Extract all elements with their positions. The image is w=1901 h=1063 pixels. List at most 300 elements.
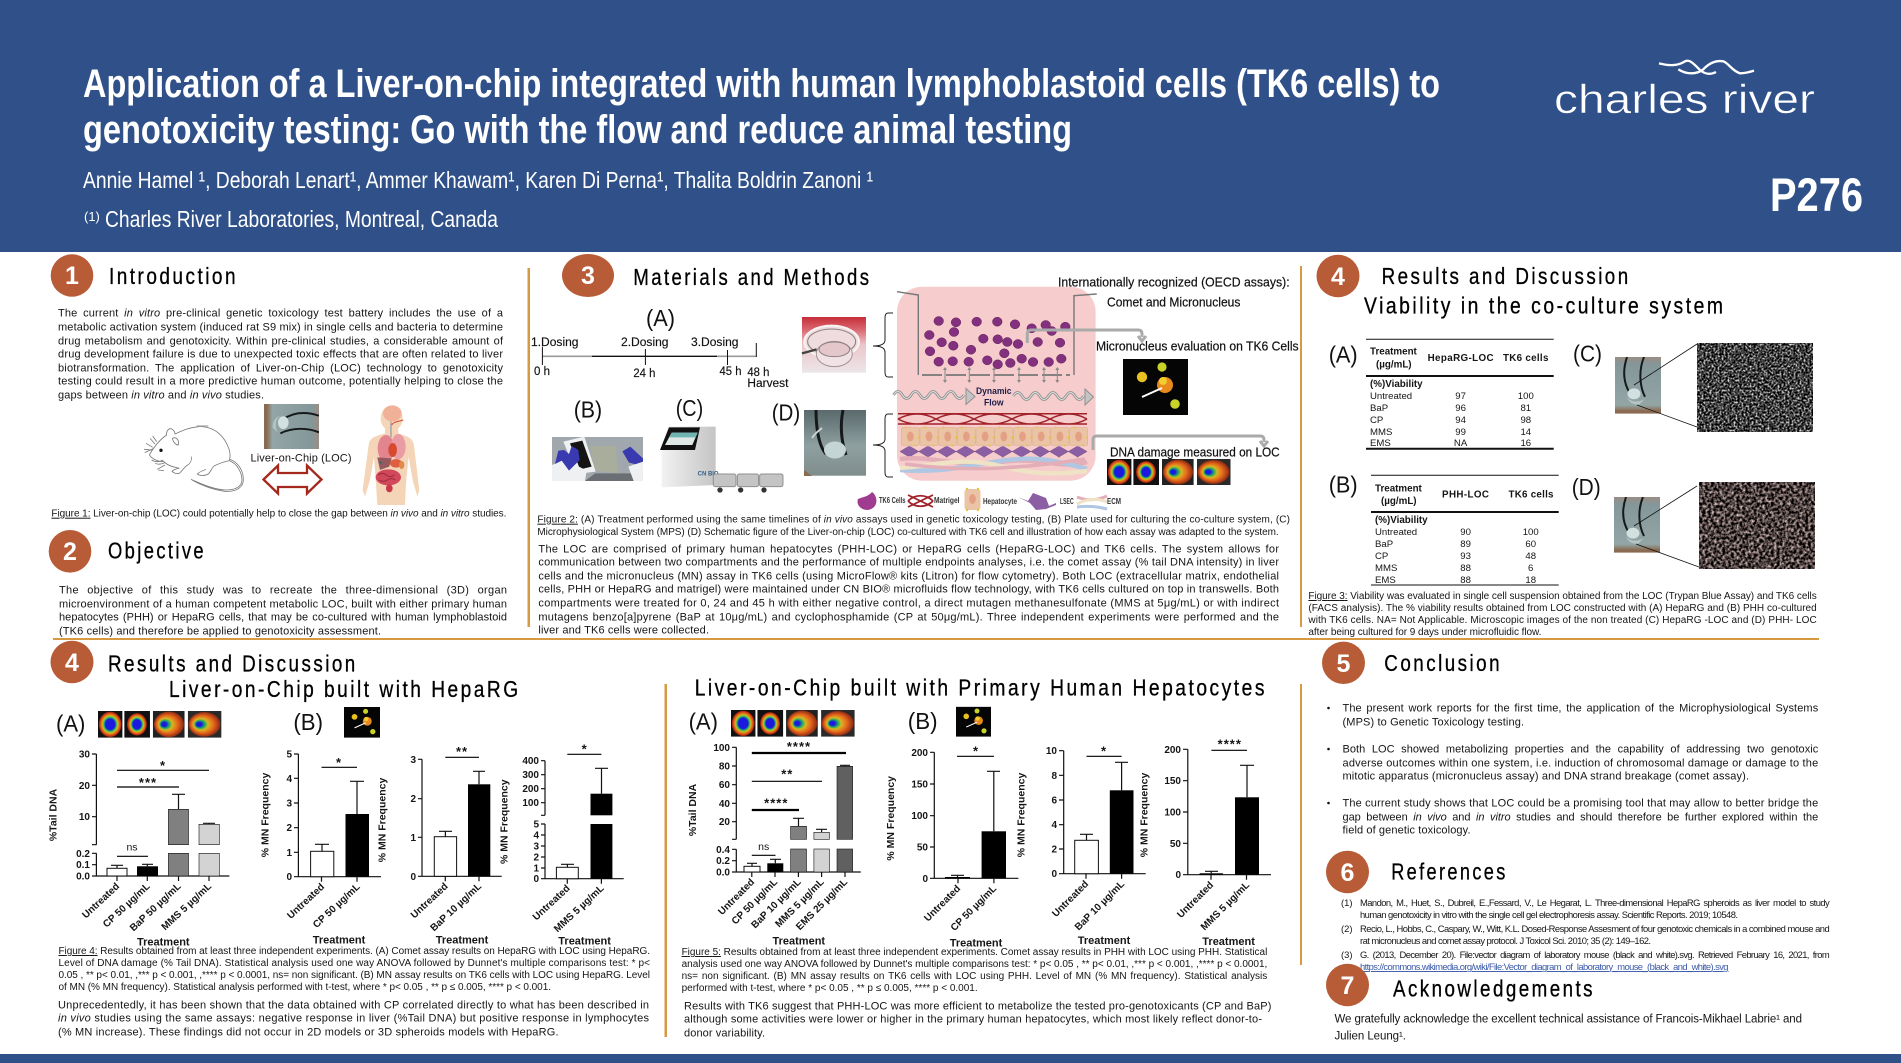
schematic: liver-on-chip compartment xyxy=(894,287,1097,481)
label table B: (B) xyxy=(1329,471,1358,497)
chart: MN frequency CP PHH: Treatment xyxy=(950,938,1003,950)
chart: MN frequency CP PHH: 200 xyxy=(911,748,928,759)
chart: MN frequency MMS PHH: 50 xyxy=(1170,839,1181,850)
chart: MN frequency BaP PHH: 0 xyxy=(1051,869,1057,880)
table B: PHH-LOC viability: (µg/mL) xyxy=(1381,496,1417,507)
chart: tail DNA HepaRG: %Tail DNA xyxy=(48,788,60,841)
panel: acknowledgements xyxy=(1326,964,1802,1042)
bullet points: field of genetic toxicology. xyxy=(1342,825,1470,837)
logo: charles river xyxy=(1554,61,1815,122)
reference list: G. (2013, December 20). File:vector diagram of laboratory mouse (black and white).svg. Retrieved February 16, 2021, from xyxy=(1360,949,1830,960)
label D: (D) xyxy=(772,400,800,426)
table A: HepaRG-LOC viability: Treatment xyxy=(1370,347,1418,358)
table B: PHH-LOC viability: 100 xyxy=(1523,527,1539,538)
chart: tail DNA HepaRG: 0.0 xyxy=(76,872,90,882)
chart: tail DNA PHH xyxy=(687,739,861,948)
reference list: (1) xyxy=(1341,897,1352,908)
badge 3 xyxy=(562,254,614,297)
chart: tail DNA HepaRG: 20 xyxy=(79,781,90,792)
chart: tail DNA HepaRG: ns xyxy=(126,842,138,854)
chart: MN frequency MMS PHH: 0 xyxy=(1175,870,1181,881)
table A: HepaRG-LOC viability: EMS xyxy=(1370,438,1391,449)
schematic: matrigel layer xyxy=(898,414,1087,424)
label B: (B) xyxy=(574,396,602,422)
chart: MN frequency CP PHH: Untreated xyxy=(922,883,963,924)
panel: viability results xyxy=(1307,255,1817,638)
chart: tail DNA HepaRG: * xyxy=(160,758,166,773)
figure 4 caption: Figure 4: Results obtained from at least three independent experiments. (A) Comet assay results on HepaRG with LOC using HepaRG. xyxy=(58,946,650,957)
photo: culture plate in gloved hands xyxy=(552,437,643,481)
table B: PHH-LOC viability: 90 xyxy=(1460,527,1471,538)
chart: tail DNA PHH: ** xyxy=(781,766,793,782)
table B: PHH-LOC viability: 89 xyxy=(1460,539,1471,550)
heading: results and discussion: Results and Discussion xyxy=(108,651,358,677)
table B: PHH-LOC viability: CP xyxy=(1375,551,1388,562)
chart: MN frequency MMS: % MN Frequency xyxy=(498,779,510,864)
reference list: Mandon, M., Huet, S., Dubreil, E.,Fessard, V., Le Hegarat, L. Three-dimensional HepaRG spheroids as liver model to study xyxy=(1360,897,1830,908)
table A: HepaRG-LOC viability: 94 xyxy=(1455,415,1467,426)
bullet points xyxy=(1327,703,1819,837)
heading: objective: Objective xyxy=(108,538,206,564)
logo: charles river: charles river xyxy=(1554,76,1815,122)
figure 3 caption: Figure 3: Viability was evaluated in single cell suspension obtained from the LOC (Trypan Blue Assay) and TK6 cells xyxy=(1308,591,1817,602)
objective text: microenvironment of a human competent metabolic LOC, built with either primary human xyxy=(59,598,507,610)
chart: MN frequency BaP PHH: * xyxy=(1101,744,1107,758)
figure 4 caption: of MN (% MN frequency). Statistical analysis performed with t-test, where * p< 0.05 , ** p ≤ 0.005, **** p < 0.001. xyxy=(58,982,551,993)
figure 2 caption xyxy=(537,515,1290,538)
heading: introduction: Introduction xyxy=(109,263,238,289)
badge 1 xyxy=(51,254,93,297)
chart: tail DNA HepaRG: 10 xyxy=(79,812,90,823)
chart: MN frequency CP: 5 xyxy=(286,750,292,760)
chart: MN frequency MMS PHH: Untreated xyxy=(1175,880,1216,921)
badge 3: 3 xyxy=(581,262,595,290)
badge 4 bottom xyxy=(50,641,94,683)
table B: PHH-LOC viability: MMS xyxy=(1375,563,1397,574)
objective text: (TK6 cells) and therefore be applied to genotoxicity assessment. xyxy=(59,626,381,638)
chart: MN frequency MMS: 2 xyxy=(533,852,539,864)
chart: MN frequency CP: 3 xyxy=(286,798,292,810)
micronucleus image xyxy=(956,707,991,737)
bullet points: adverse outcomes within one system, i.e. induction of chromosomal damage or damage to the xyxy=(1342,758,1818,770)
intro text: testing could result in a more predictive human outcome, potentially helping to close the xyxy=(58,376,503,388)
bullet points: gap between in vivo and in vitro studies and should therefore be further explored within the xyxy=(1342,812,1818,824)
chart: MN frequency BaP PHH: 10 xyxy=(1046,746,1057,757)
comet images xyxy=(98,711,221,738)
chart: tail DNA PHH: BaP 10 µg/mL xyxy=(749,877,804,931)
badge 5: 5 xyxy=(1337,650,1351,678)
figure 4 caption: 0.05 , ** p< 0.01, ,*** p < 0.001, ,**** p < 0.0001, ns= non significant. (B) MN assay results on TK6 cells with LOC using HepaRG. Level xyxy=(58,970,650,981)
table A: HepaRG-LOC viability xyxy=(1366,339,1554,449)
table B: PHH-LOC viability: 88 xyxy=(1460,563,1471,574)
table A: HepaRG-LOC viability: 16 xyxy=(1520,438,1531,449)
panel: introduction xyxy=(51,254,506,520)
chart: MN frequency MMS: 1 xyxy=(533,864,539,874)
methods text: mutagens benzo[a]pyrene (BaP at 10μg/mL) and cyclophosphamide (CP at 50μg/mL). Three independent experiments were performed and the xyxy=(538,612,1279,624)
figure 2 caption: Figure 2: (A) Treatment performed using the same timelines of in vivo assays used in genetic toxicology testing, (B) Plate used for culturing the co-culture system, (C) xyxy=(537,515,1290,526)
acknowledgement text: Julien Leung¹. xyxy=(1334,1030,1406,1042)
schematic: hepatocyte layer xyxy=(901,426,1088,446)
bullet points: Both LOC showed metabolizing properties and the capability of addressing two genotoxic xyxy=(1342,744,1819,756)
chart: tail DNA PHH: 80 xyxy=(719,762,730,772)
HepaRG results text xyxy=(58,1000,650,1038)
acknowledgement text xyxy=(1334,1014,1802,1042)
timeline: 0 h xyxy=(534,366,550,378)
affiliation: (1) xyxy=(84,209,100,224)
table A: HepaRG-LOC viability: 81 xyxy=(1520,403,1531,414)
methods text: communication between two compartments and the performance of multiple endpoints analyses, i.e. the comet assay (% tail DNA intensity) in liver xyxy=(538,557,1279,569)
methods text: The LOC are comprised of primary human hepatocytes (PHH-LOC) or HepaRG cells (HepaRG-LOC) and TK6 cells. The system allows for xyxy=(538,544,1279,556)
chart: MN frequency BaP PHH: 4 xyxy=(1051,820,1057,831)
chart: MN frequency MMS: 300 xyxy=(522,770,539,781)
chart: MN frequency BaP: BaP 10 µg/mL xyxy=(429,881,484,934)
chart: MN frequency CP PHH: % MN Frequency xyxy=(885,776,897,861)
chart: MN frequency MMS: 100 xyxy=(522,798,539,809)
chart: MN frequency BaP: 2 xyxy=(410,794,416,805)
micrograph C with chip xyxy=(1615,343,1813,432)
methods text xyxy=(538,544,1279,636)
label table A: (A) xyxy=(1329,342,1358,368)
figure 5 caption: performed with t-test, where * p< 0.05 , ** p ≤ 0.005, **** p < 0.001. xyxy=(682,983,978,994)
timeline: 1.Dosing xyxy=(531,337,578,349)
table A: HepaRG-LOC viability: 14 xyxy=(1520,427,1532,438)
chart: tail DNA PHH: %Tail DNA xyxy=(687,783,699,836)
label A: (A) xyxy=(56,711,85,737)
heading: references: References xyxy=(1391,858,1508,884)
HepaRG results text: (% MN increase). These findings did not occur in 2D models or 3D spheroids models with HepaRG. xyxy=(58,1026,558,1038)
table A: HepaRG-LOC viability: BaP xyxy=(1370,403,1388,414)
chart: MN frequency BaP: Treatment xyxy=(436,935,489,947)
chart: MN frequency BaP: ** xyxy=(456,744,468,759)
chart: tail DNA HepaRG: CP 50 µg/mL xyxy=(101,881,153,930)
table B: PHH-LOC viability: 18 xyxy=(1525,575,1536,586)
chart: MN frequency MMS PHH: 100 xyxy=(1164,808,1181,818)
chart: MN frequency MMS: 4 xyxy=(533,830,539,842)
assay callout text: Internationally recognized (OECD assays): xyxy=(1058,276,1290,290)
figure 3 caption xyxy=(1307,591,1817,638)
objective text: The objective of this study was to recreate the three-dimensional (3D) organ xyxy=(59,584,507,596)
chart: MN frequency BaP: 3 xyxy=(410,755,416,766)
figure 5 caption: Figure 5: Results obtained from at least three independent experiments. Comet assay results in PHH with LOC using PHH. Statistical xyxy=(682,947,1267,958)
intro text: The current in vitro pre-clinical genetic toxicology test battery includes the use of a xyxy=(58,308,504,320)
chart: MN frequency MMS: 3 xyxy=(533,842,539,852)
chart: tail DNA PHH: MMS 5 µg/mL xyxy=(774,877,827,930)
figure 4 caption: Level of DNA damage (% Tail DNA). Statistical analysis used one way ANOVA followed by Dunnet's multiple comparisons test: * p< xyxy=(58,958,650,969)
table B: PHH-LOC viability: 88 xyxy=(1460,575,1471,586)
chart: tail DNA PHH: 60 xyxy=(719,780,730,791)
chart: MN frequency MMS PHH: Treatment xyxy=(1202,936,1255,948)
chart: MN frequency BaP PHH: % MN Frequency xyxy=(1015,773,1027,857)
chart: MN frequency MMS PHH: MMS 5 µg/mL xyxy=(1199,880,1252,933)
schematic legend: Matrigel xyxy=(934,496,960,505)
authors: Annie Hamel ¹, Deborah Lenart¹, Ammer Khawam¹, Karen Di Perna¹, Thalita Boldrin Zanoni ¹ xyxy=(83,167,873,193)
chart: MN frequency BaP PHH: Untreated xyxy=(1050,879,1091,920)
chart: MN frequency BaP PHH: Treatment xyxy=(1078,935,1131,947)
PHH results text: donor variability. xyxy=(684,1028,765,1040)
chart: MN frequency MMS PHH: **** xyxy=(1218,736,1242,752)
chart: MN frequency CP PHH: 0 xyxy=(922,874,928,885)
table B: PHH-LOC viability: (%)Viability xyxy=(1375,515,1428,526)
heading: conclusion: Conclusion xyxy=(1384,650,1502,676)
reference list: https://commons.wikimedia.org/wiki/File:Vector_diagram_of_laboratory_mouse_(black_and_white).svg xyxy=(1360,961,1728,972)
methods text: compartments were treated for 0, 24 and 45 h with either negative control, a direct mutagen methanesulfonate (MMS at 5μg/mL) or with indirect xyxy=(538,598,1279,610)
chart: MN frequency CP: Untreated xyxy=(285,882,327,922)
comet images xyxy=(1107,459,1230,485)
table B: PHH-LOC viability: Treatment xyxy=(1375,484,1423,495)
bullet points: The present work reports for the first time, the application of the Microphysiological Systems xyxy=(1342,703,1819,715)
table A: HepaRG-LOC viability: Untreated xyxy=(1370,391,1412,402)
badge 6 xyxy=(1326,851,1369,893)
heading: materials and methods: Materials and Methods xyxy=(633,264,871,290)
table B: PHH-LOC viability: 93 xyxy=(1460,551,1471,562)
objective text: hepatocytes (PHH) or HepaRG cells, that may be co-cultured with human lymphoblastoid xyxy=(59,612,507,624)
badge 1: 1 xyxy=(65,262,79,290)
timeline: 45 h xyxy=(720,366,742,378)
bullet points: (MPS) to Genetic Toxicology testing. xyxy=(1342,717,1524,729)
panel: references xyxy=(1326,851,1830,972)
table B: PHH-LOC viability: 60 xyxy=(1525,539,1536,550)
HepaRG results text: in vivo studies using the same assays: negative response in liver (%Tail DNA) but positive response in lymphocytes xyxy=(58,1013,650,1025)
timeline: 3.Dosing xyxy=(691,337,738,349)
affiliation: Charles River Laboratories, Montreal, Canada xyxy=(105,206,498,232)
intro text: biotransformation. The application of Liver-on-Chip (LOC) technology to genotoxicity xyxy=(58,362,504,374)
table A: HepaRG-LOC viability: CP xyxy=(1370,415,1383,426)
chart: MN frequency MMS PHH xyxy=(1139,736,1271,948)
chart: MN frequency CP: % MN Frequency xyxy=(260,773,272,857)
badge 7 xyxy=(1326,964,1369,1006)
chart: tail DNA PHH: **** xyxy=(764,796,788,810)
chart: MN frequency BaP PHH xyxy=(1015,744,1146,947)
chart: MN frequency BaP PHH: BaP 10 µg/mL xyxy=(1073,879,1127,933)
chart: MN frequency MMS: * xyxy=(582,742,588,756)
comet images xyxy=(731,710,855,737)
label C: (C) xyxy=(676,395,703,421)
timeline: 24 h xyxy=(633,368,655,380)
methods text: cells, PHH or HepaRG and matrigel) were maintained under CN BIO® microfluids flow technology, with TK6 cells cultured on top in transwells. Both xyxy=(538,584,1279,596)
badge 4 top xyxy=(1316,255,1360,297)
figure 2 caption: Microphysiological System (MPS) (D) Schematic figure of the Liver-on-chip (LOC) co-cultured with TK6 cell and illustration of how each assay was adapted to the system. xyxy=(537,527,1279,538)
chart: tail DNA HepaRG: 30 xyxy=(79,750,90,760)
chart: MN frequency MMS: 400 xyxy=(522,756,539,767)
schematic: dynamic flow label: Flow xyxy=(984,398,1005,408)
chart: MN frequency BaP PHH: 8 xyxy=(1051,771,1057,782)
figure 5 caption xyxy=(682,947,1267,994)
heading: results and discussion: Results and Discussion xyxy=(1382,263,1631,289)
chart: MN frequency BaP PHH: 6 xyxy=(1051,796,1057,806)
acknowledgement text: We gratefully acknowledge the excellent technical assistance of Francois-Mikhael Labrie¹ and xyxy=(1334,1014,1802,1026)
chart: tail DNA HepaRG: Treatment xyxy=(137,937,190,949)
timeline: Harvest xyxy=(747,378,789,390)
figure 1: liver chip photo xyxy=(264,404,319,449)
chart: MN frequency CP: 2 xyxy=(286,823,292,834)
badge 4 top: 4 xyxy=(1331,263,1345,291)
assay callout text xyxy=(1058,276,1290,310)
chart: MN frequency BaP: 1 xyxy=(410,833,416,844)
HepaRG results text: Unprecedentedly, it has been shown that the data obtained with CP correlated directly to what has been described in xyxy=(58,1000,649,1012)
chart: MN frequency MMS PHH: 150 xyxy=(1164,776,1181,787)
photo: microphysiological system instrument: CN BIO xyxy=(698,472,719,478)
title xyxy=(83,62,1440,152)
brackets xyxy=(873,313,893,477)
chart: MN frequency CP PHH: * xyxy=(973,744,979,758)
table A: HepaRG-LOC viability: MMS xyxy=(1370,427,1392,438)
table B: PHH-LOC viability: PHH-LOC xyxy=(1442,490,1489,501)
label B: (B) xyxy=(908,708,938,734)
section dividers xyxy=(53,266,1819,1037)
schematic: flow arrows xyxy=(894,388,1094,405)
reference list: Recio, L., Hobbs, C., Caspary, W., Witt, K.L. Dosed-Response Assesment of four genotoxic chemicals in a combined mouse and xyxy=(1360,923,1830,934)
label C: (C) xyxy=(1573,341,1602,367)
schematic: ECM layer xyxy=(900,458,1087,473)
chart: MN frequency BaP: Untreated xyxy=(409,881,451,921)
subheading: PHH: Liver-on-Chip built with Primary Human Hepatocytes xyxy=(695,675,1267,701)
chart: tail DNA PHH: Treatment xyxy=(773,936,825,948)
chart: MN frequency CP xyxy=(260,750,381,947)
panel: materials and methods xyxy=(531,254,1299,636)
micronucleus image xyxy=(1123,359,1188,415)
reference list: human genotoxicity in vitro with the single cell gel electrophoresis assay. Scientific Reports. 2019; 10548. xyxy=(1360,909,1738,920)
figure 4 caption xyxy=(58,946,650,993)
chart: MN frequency MMS: Treatment xyxy=(558,936,611,948)
bullet points: The current study shows that LOC could be a promising tool that may allow to better bridge the xyxy=(1342,798,1818,810)
table A: HepaRG-LOC viability: TK6 cells xyxy=(1503,353,1549,364)
chart: MN frequency CP PHH: 100 xyxy=(911,811,928,822)
chart: MN frequency CP PHH: 150 xyxy=(911,780,928,790)
table A: HepaRG-LOC viability: NA xyxy=(1454,438,1468,449)
badge 6: 6 xyxy=(1341,859,1354,887)
figure 3 caption: (FACS analysis). The % viability results obtained from LOC constructed with (A) HepaRG and (B) PHH co-cultured xyxy=(1308,603,1817,614)
chart: MN frequency MMS: 0 xyxy=(533,874,539,885)
label A: (A) xyxy=(689,708,718,734)
timeline xyxy=(531,337,789,390)
badge 2: 2 xyxy=(63,538,77,566)
figure 1: human body with organs xyxy=(363,405,419,505)
table A: HepaRG-LOC viability: 100 xyxy=(1518,391,1534,402)
figure 3 caption: after being cultured for 9 days under microfluidic flow. xyxy=(1308,627,1541,638)
label D: (D) xyxy=(1572,474,1601,500)
table B: PHH-LOC viability: BaP xyxy=(1375,539,1393,550)
table A: HepaRG-LOC viability: HepaRG-LOC xyxy=(1428,353,1494,364)
table A: HepaRG-LOC viability: (%)Viability xyxy=(1370,379,1423,390)
reference list: rat micronucleus and comet assay protocol. J Toxicol Sci. 2010; 35 (2): 149–162. xyxy=(1360,935,1651,946)
badge 5 xyxy=(1322,642,1365,684)
badge 4 bottom: 4 xyxy=(65,649,79,677)
chart: tail DNA PHH: Untreated xyxy=(716,877,757,918)
chart: tail DNA PHH: EMS 25 µg/mL xyxy=(794,877,850,933)
panel: conclusion xyxy=(1322,642,1819,837)
methods text: cells and the micronucleus (MN) assay in TK6 cells (using MicroFlow® kits (Litron) for flow cytometry). Both LOC (extracellular matrix, endothelial xyxy=(538,570,1279,582)
chart: MN frequency CP PHH: CP 50 µg/mL xyxy=(949,883,999,934)
chart: tail DNA PHH: ns xyxy=(758,841,769,853)
chart: tail DNA HepaRG: MMS 5 µg/mL xyxy=(160,881,214,933)
figure 3 caption: with TK6 cells. NA= Not Applicable. Microscopic images of the non treated (C) HepaRG -LOC and (D) PHH- LOC xyxy=(1307,615,1817,626)
chart: MN frequency MMS: 200 xyxy=(522,784,539,795)
schematic: dynamic flow label xyxy=(976,386,1012,408)
schematic: dynamic flow label: Dynamic xyxy=(976,386,1012,396)
chart: tail DNA HepaRG: 0.1 xyxy=(76,860,90,871)
label B: (B) xyxy=(293,709,323,735)
schematic: TK6 cells xyxy=(924,316,1070,369)
intro text: gaps between in vitro and in vivo studies. xyxy=(58,390,264,402)
bottom band xyxy=(0,1054,1901,1063)
schematic legend xyxy=(857,488,1121,511)
photo: microphysiological system instrument xyxy=(660,427,783,493)
intro text: drug development failure is due to unexpected toxic effects that are often related to liver xyxy=(58,349,503,361)
table A: HepaRG-LOC viability: 99 xyxy=(1455,427,1466,438)
chart: MN frequency MMS: MMS 5 µg/mL xyxy=(552,883,607,935)
chart: tail DNA PHH: **** xyxy=(787,739,811,754)
title: Application of a Liver-on-chip integrated with human lymphoblastoid cells (TK6 cells) to xyxy=(83,62,1440,106)
badge 7: 7 xyxy=(1341,972,1354,1000)
chart: tail DNA HepaRG: BaP 50 µg/mL xyxy=(128,881,184,934)
figure 1: mouse illustration xyxy=(144,426,243,491)
chart: tail DNA PHH: 0.0 xyxy=(716,868,730,878)
subheading: HepaRG: Liver-on-Chip built with HepaRG xyxy=(169,676,521,702)
chart: MN frequency MMS PHH: 200 xyxy=(1164,745,1181,756)
chart: MN frequency CP: Treatment xyxy=(313,935,366,947)
header band xyxy=(0,0,1901,252)
photo: transwell plate xyxy=(802,317,866,373)
chart: MN frequency CP: CP 50 µg/mL xyxy=(311,882,363,931)
chart: MN frequency BaP xyxy=(376,744,502,947)
micronucleus label: Micronucleus evaluation on TK6 Cells xyxy=(1096,340,1299,354)
table A: HepaRG-LOC viability: (µg/mL) xyxy=(1376,359,1412,370)
figure 5 caption: ns= non significant. (B) MN assay results on TK6 cells with LOC using PHH. Level of MN (% MN frequency). Statistical analysis xyxy=(682,971,1267,982)
reference list xyxy=(1341,897,1830,972)
badge 2 xyxy=(49,530,91,573)
chart: MN frequency BaP: 0 xyxy=(410,872,416,883)
timeline: 2.Dosing xyxy=(621,337,668,349)
reference list: (3) xyxy=(1341,949,1352,960)
objective text xyxy=(59,584,507,638)
chart: MN frequency CP: 0 xyxy=(286,872,292,883)
table B: PHH-LOC viability: Untreated xyxy=(1375,527,1417,538)
title: genotoxicity testing: Go with the flow and reduce animal testing xyxy=(83,108,1072,152)
methods text: liver and TK6 cells were collected. xyxy=(538,624,709,636)
label A: (A) xyxy=(646,305,675,331)
reference list: (2) xyxy=(1341,923,1352,934)
schematic legend: ECM xyxy=(1107,497,1121,506)
subheading: viability: Viability in the co-culture system xyxy=(1364,292,1726,318)
chart: tail DNA HepaRG: 0.2 xyxy=(76,849,90,860)
PHH results text xyxy=(684,1000,1271,1040)
chart: tail DNA HepaRG: Untreated xyxy=(80,881,122,921)
panel: objective xyxy=(49,530,507,638)
arrow: DNA damage callout xyxy=(1093,436,1268,450)
figure 1 caption: Figure 1: Liver-on-chip (LOC) could potentially help to close the gap between in vivo and in vitro studies. xyxy=(51,509,506,520)
chart: MN frequency CP PHH: 50 xyxy=(917,842,928,854)
intro text: drug metabolism and genotoxicity. Within pre-clinical studies, a considerable amount of xyxy=(58,335,504,347)
chart: tail DNA HepaRG: *** xyxy=(139,775,157,790)
bullet points: mitotic apparatus (micronucleus assay) and DNA strand breakage (comet assay). xyxy=(1342,771,1749,783)
chart: tail DNA PHH: 20 xyxy=(719,817,730,828)
schematic legend: Hepatocyte xyxy=(983,497,1017,506)
panel: results HepaRG xyxy=(48,641,650,1038)
table A: HepaRG-LOC viability: 97 xyxy=(1455,391,1466,402)
schematic: LSEC layer xyxy=(900,446,1087,457)
PHH results text: Results with TK6 suggest that PHH-LOC was more efficient to metabolize the tested pro-genotoxicants (CP and BaP) xyxy=(684,1000,1271,1012)
micronucleus image xyxy=(344,707,380,738)
PHH results text: although some activities were lower or higher in the primary human hepatocytes, which most likely reflect donor-to- xyxy=(684,1013,1262,1025)
chart: MN frequency BaP PHH: 2 xyxy=(1051,844,1057,856)
schematic: exchange arrows xyxy=(943,367,1059,383)
schematic legend: LSEC xyxy=(1060,497,1074,506)
table B: PHH-LOC viability xyxy=(1371,475,1559,586)
chart: tail DNA PHH: CP 50 µg/mL xyxy=(730,877,780,927)
timeline: 48 h xyxy=(747,367,769,379)
chart: tail DNA PHH: 100 xyxy=(713,743,730,754)
table A: HepaRG-LOC viability: 96 xyxy=(1455,403,1466,414)
